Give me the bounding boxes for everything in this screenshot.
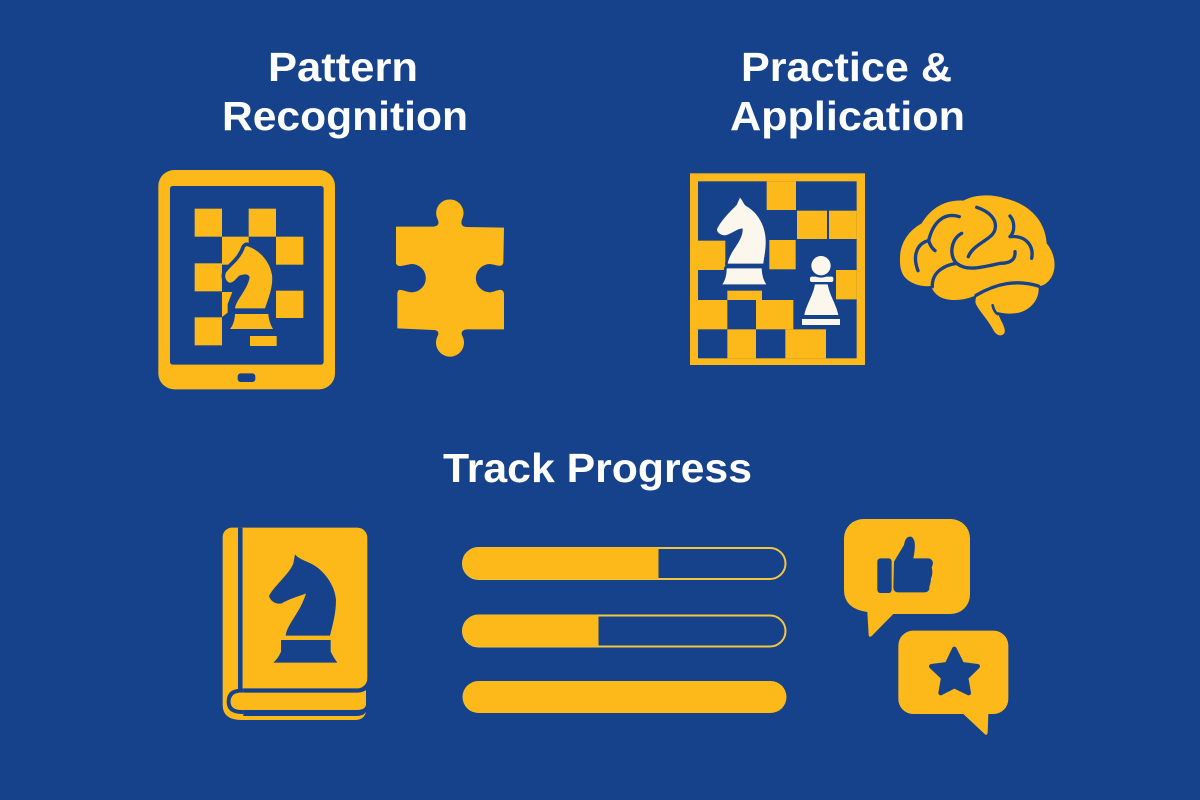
icon: book with knight xyxy=(223,528,367,720)
icon: tablet with chess knight xyxy=(158,170,335,389)
brain folds xyxy=(916,207,1038,314)
book pages xyxy=(231,690,366,710)
book cover xyxy=(243,528,367,688)
star glyph xyxy=(931,649,978,693)
progress bars xyxy=(462,548,786,713)
heading: Track Progress: Track Progress xyxy=(443,445,752,491)
heading: Practice & Application xyxy=(730,44,965,139)
knight silhouette on cover xyxy=(269,554,337,663)
heading: Practice & Application: Application xyxy=(730,93,965,139)
icon: puzzle piece xyxy=(396,199,504,357)
tablet knight piece xyxy=(225,246,273,329)
progress bar 2 xyxy=(462,615,786,646)
white pawn xyxy=(802,256,840,325)
heading: Practice & Application: Practice & xyxy=(741,44,952,90)
icon: brain xyxy=(900,195,1055,335)
book spine and page lines xyxy=(229,528,243,712)
thumbs-up glyph xyxy=(877,537,933,593)
progress bar 1 xyxy=(462,548,786,579)
white knight xyxy=(717,198,766,284)
icon: speech bubble with thumbs up xyxy=(844,519,970,637)
icon: speech bubble with star xyxy=(898,631,1008,735)
board squares xyxy=(698,181,857,358)
icon: chessboard with knight and pawn xyxy=(690,173,865,365)
progress bar 3 xyxy=(462,681,786,713)
heading: Pattern Recognition xyxy=(222,44,468,139)
heading: Pattern Recognition: Pattern xyxy=(268,44,418,90)
tablet chessboard squares xyxy=(195,209,303,346)
heading: Pattern Recognition: Recognition xyxy=(222,93,468,139)
